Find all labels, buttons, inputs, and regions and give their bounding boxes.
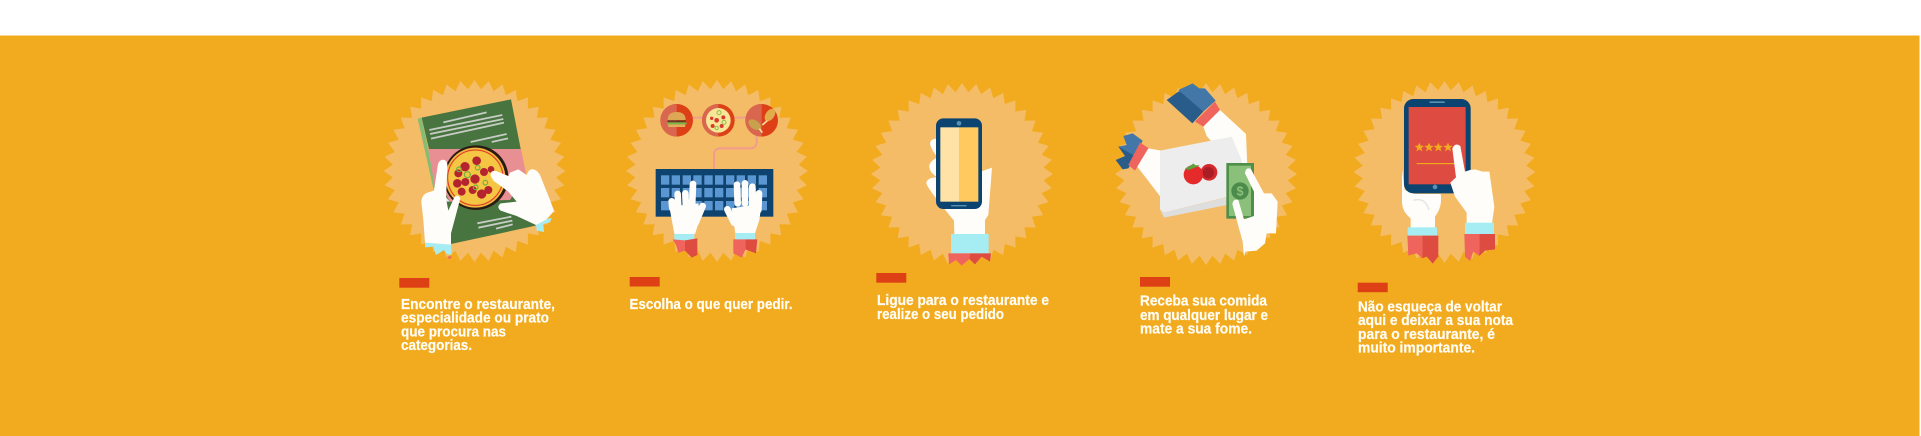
upper sleeve: [1167, 83, 1216, 123]
accent bar 1: [399, 278, 429, 288]
left typing hand: [669, 184, 703, 258]
tablet: [1404, 99, 1471, 193]
phone: [936, 118, 982, 209]
banknote: $: [1236, 185, 1244, 199]
banknote: [1226, 163, 1254, 219]
right sleeve: [1464, 234, 1495, 261]
upper cuff: [1195, 102, 1220, 127]
caption 3: realize o seu pedido: [877, 306, 1004, 323]
starburst badge 4: [1115, 83, 1297, 265]
caption 1: categorias.: [401, 337, 472, 354]
hand holding money: [1232, 168, 1278, 257]
caption 4: mate a sua fome.: [1140, 320, 1252, 338]
caption 4: Receba sua comida: [1140, 292, 1268, 310]
right typing hand: [727, 183, 762, 258]
pizza box: [1160, 137, 1242, 218]
left cuff: [1128, 143, 1149, 171]
accent bar 3: [876, 273, 906, 283]
caption 4: [1140, 292, 1268, 338]
caption 3: Ligue para o restaurante e: [877, 292, 1049, 309]
icon: menu with pizza and hands: [418, 99, 554, 259]
icon: hand holding phone: [926, 118, 992, 266]
caption 1: que procura nas: [401, 324, 506, 340]
panel: step 1 find the restaurant: [384, 80, 566, 354]
caption 4: em qualquer lugar e: [1140, 307, 1268, 324]
left hand: [1402, 169, 1441, 228]
right cuff: [1465, 223, 1494, 234]
cuff: [951, 234, 989, 253]
left hand and cuff: [421, 160, 460, 259]
menu pink band: [428, 149, 526, 202]
icon: food circles and keyboard: [656, 104, 778, 258]
starburst badge 2: [626, 80, 808, 262]
panel: step 4 receive the food: [1115, 83, 1297, 338]
upper arm: [1203, 110, 1247, 167]
caption 1: especialidade ou prato: [401, 310, 549, 326]
hand: [926, 139, 992, 235]
accent bar 5: [1358, 283, 1388, 292]
left sleeve: [1116, 133, 1143, 169]
pizza: [444, 145, 508, 210]
tomatoes: [1184, 163, 1217, 184]
caption 2: Escolha o que quer pedir.: [630, 296, 792, 313]
caption 5: muito importante.: [1358, 340, 1475, 356]
left arm: [1137, 148, 1162, 198]
caption 1: Encontre o restaurante,: [401, 296, 555, 313]
accent bar 2: [630, 277, 660, 286]
caption 5: Não esqueça de voltar: [1358, 298, 1502, 316]
panel: step 2 choose the order: [626, 80, 808, 313]
right hand and cuff: [491, 169, 554, 232]
icon: tablet with rating and hands: [1402, 99, 1495, 264]
icon: burger: [660, 104, 693, 137]
palm crease: [1413, 200, 1429, 210]
icon: chicken legs: [745, 104, 778, 137]
right hand: [1450, 144, 1494, 223]
menu cover: [422, 99, 536, 244]
starburst badge 5: [1354, 81, 1536, 263]
panel: step 5 leave a rating: [1354, 81, 1536, 356]
menu spine: [418, 118, 437, 190]
starburst badge 1: [384, 80, 566, 262]
left sleeve: [1407, 236, 1438, 264]
accent bar 4: [1140, 277, 1170, 287]
panel: step 3 call the restaurant: [871, 83, 1053, 323]
starburst badge 3: [871, 83, 1053, 265]
caption 1: [401, 296, 555, 354]
caption 5: aqui e deixar a sua nota: [1358, 312, 1514, 329]
icon: pizza box, money and hands: [1116, 83, 1278, 257]
connector lines: [690, 118, 757, 170]
menu text lines: [429, 112, 513, 229]
caption 3: [877, 292, 1049, 323]
caption 5: [1358, 298, 1514, 356]
left cuff: [1408, 227, 1437, 236]
rating stars: [1415, 143, 1453, 151]
icon: pizza circle: [702, 104, 735, 137]
sleeve: [948, 253, 991, 266]
caption 5: para o restaurante, é: [1358, 326, 1495, 343]
keyboard: [656, 169, 773, 217]
rating line: [1417, 163, 1457, 164]
